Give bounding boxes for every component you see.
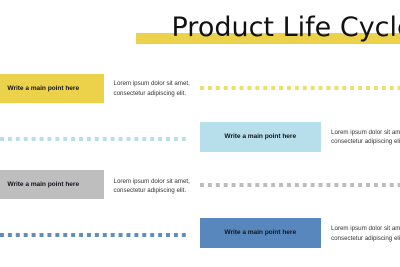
text: yellow description: consectetur adipiscing elit.	[114, 90, 186, 97]
dotted line: gray	[200, 182, 400, 186]
text: blue description	[331, 225, 400, 242]
dotted line: yellow	[200, 86, 400, 90]
text: gray description: consectetur adipiscing elit.	[114, 187, 186, 194]
text: yellow description	[114, 80, 190, 97]
panel: gray main point	[0, 170, 104, 199]
panel: gray main point: Write a main point here	[7, 181, 79, 188]
panel: blue main point	[200, 218, 320, 248]
title underline bar	[136, 33, 400, 44]
panel: light blue main point	[200, 122, 320, 152]
panel: blue main point: Write a main point here	[224, 229, 296, 236]
text: gray description	[114, 178, 190, 194]
dotted line: blue	[0, 233, 187, 237]
panel: light blue main point: Write a main point here	[224, 133, 296, 140]
panel: yellow main point: Write a main point here	[7, 84, 79, 92]
text: light blue description	[331, 128, 400, 145]
text: yellow description: Lorem ipsum dolor sit amet,	[114, 80, 190, 87]
dotted line: light blue	[0, 136, 187, 140]
text: gray description: Lorem ipsum dolor sit amet,	[114, 178, 190, 184]
panel: yellow main point	[0, 74, 104, 103]
